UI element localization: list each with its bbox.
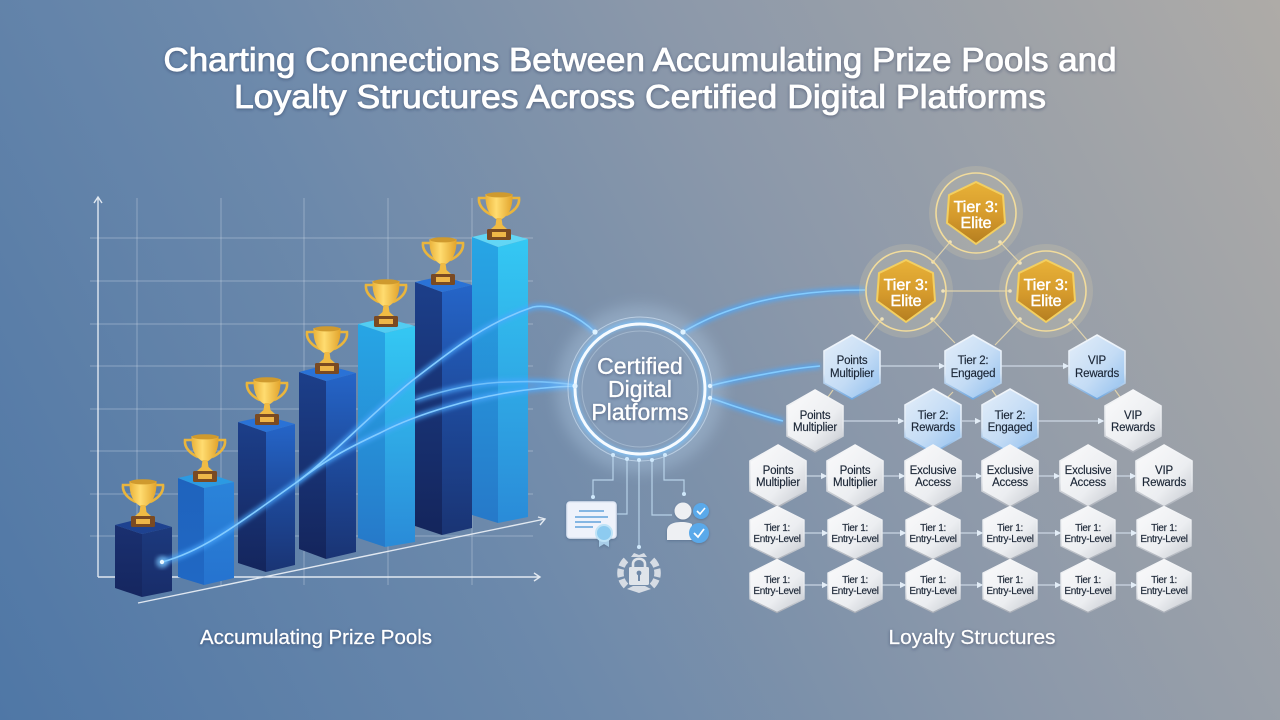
hexagon: tier 2 engaged: Engaged [951,368,995,380]
chart grid and axes [90,197,545,603]
bar 7 [472,231,528,523]
hexagon: tier 1 row 5 a: Tier 1: [764,575,790,586]
hexagon: points multiplier row 2: Multiplier [793,422,837,434]
elite hexagon right [999,244,1093,338]
hexagon: vip rewards row 3 [1136,445,1192,507]
hexagon: vip rewards row 3: VIP [1155,465,1173,477]
elite hexagon left: Tier 3: [884,277,928,294]
hexagon: tier 1 row 4 c: Entry-Level [909,534,957,545]
hexagon: exclusive access b: Exclusive [987,465,1033,477]
hexagon: vip rewards: Rewards [1075,368,1119,380]
bar 5 [358,318,415,547]
hexagon: tier 2 engaged [945,335,1001,399]
title [164,41,1116,115]
icon: certificate [567,502,616,547]
icon: trophy 5 [366,279,406,327]
hexagon: tier 2 engaged row 2: Tier 2: [995,410,1025,422]
hexagon: tier 1 row 4 a: Entry-Level [753,534,801,545]
hexagon: tier 1 row 5 f [1137,560,1191,612]
hexagon: tier 1 row 4 c: Tier 1: [920,523,946,534]
connector lines between loyalty hexagons [804,240,1136,585]
hexagon: exclusive access a [905,445,961,507]
hexagon: vip rewards row 2: Rewards [1111,422,1155,434]
hexagon: tier 1 row 4 b: Tier 1: [842,523,868,534]
loyalty pyramid [750,166,1192,612]
label: loyalty structures: Loyalty Structures [888,627,1056,649]
hexagon: tier 2 engaged row 2: Engaged [988,422,1032,434]
hub: certified digital platforms: Certified [597,353,683,379]
hexagon: exclusive access a: Access [915,477,951,489]
hexagon: tier 1 row 5 b: Entry-Level [831,586,879,597]
bar 4 [299,365,356,559]
hexagon: vip rewards [1069,335,1125,399]
hexagon: exclusive access c [1060,445,1116,507]
icon: trophy 2 [185,434,225,482]
elite hexagon top: Tier 3: [954,199,998,216]
hub: certified digital platforms: Platforms [591,399,689,425]
hexagon: tier 1 row 5 f: Entry-Level [1140,586,1188,597]
hexagon: tier 2 rewards: Tier 2: [918,410,948,422]
hexagon: tier 1 row 5 e: Entry-Level [1064,586,1112,597]
connector lines from hub to icons [591,453,686,549]
glowing connector curves from chart to hub [156,290,865,568]
bar chart: accumulating prize pools [90,192,545,603]
hexagon: points multiplier row 3a [750,445,806,507]
hexagon: tier 2 rewards [905,389,961,453]
hexagon: tier 1 row 4 f [1137,506,1191,560]
hub: certified digital platforms: Digital [608,376,672,402]
icon: trophy 7 [479,192,519,240]
title: Charting Connections Between Accumulating Prize Pools and [164,41,1116,78]
label: accumulating prize pools: Accumulating Prize Pools [200,627,432,649]
hexagon: tier 1 row 5 c [906,560,960,612]
hexagon: points multiplier: Points [837,355,868,367]
icon: trophy 4 [307,326,347,374]
hexagon: tier 2 engaged row 2 [982,389,1038,453]
hexagon: tier 1 row 4 c [906,506,960,560]
hexagon: tier 1 row 4 f: Tier 1: [1151,523,1177,534]
hexagon: exclusive access b: Access [992,477,1028,489]
hexagon: tier 1 row 4 b: Entry-Level [831,534,879,545]
icon: trophy 6 [423,237,463,285]
bar 6 [415,276,472,535]
icon: verified users [667,502,709,543]
hexagon: points multiplier: Multiplier [830,368,874,380]
title: Loyalty Structures Across Certified Digital Platforms [234,78,1046,115]
hexagon: tier 1 row 4 a: Tier 1: [764,523,790,534]
hexagon: tier 1 row 4 a [750,506,804,560]
hexagon: points multiplier [824,335,880,399]
hexagon: points multiplier row 2 [787,390,843,452]
bar 3 [238,416,295,572]
icon: trophy 1 [123,479,163,527]
hexagon: exclusive access c: Exclusive [1065,465,1111,477]
hexagon: tier 2 rewards: Rewards [911,422,955,434]
hexagon: tier 1 row 5 d: Tier 1: [997,575,1023,586]
hexagon: tier 1 row 5 c: Tier 1: [920,575,946,586]
hexagon: exclusive access a: Exclusive [910,465,956,477]
bar 1 [115,518,172,597]
hexagon: points multiplier row 3b: Points [840,465,871,477]
hexagon: tier 1 row 5 a [750,560,804,612]
hexagon: tier 1 row 5 f: Tier 1: [1151,575,1177,586]
hexagon: tier 1 row 4 d [983,506,1037,560]
elite hexagon right: Elite [1030,293,1062,310]
hexagon: tier 1 row 4 e: Tier 1: [1075,523,1101,534]
hexagon: tier 1 row 5 e: Tier 1: [1075,575,1101,586]
hexagon: tier 1 row 5 b: Tier 1: [842,575,868,586]
hexagon: tier 1 row 4 e: Entry-Level [1064,534,1112,545]
elite hexagon left: Elite [890,293,922,310]
hexagon: tier 1 row 5 d [983,560,1037,612]
hexagon: exclusive access b [982,445,1038,507]
hexagon: tier 1 row 4 d: Entry-Level [986,534,1034,545]
hub: certified digital platforms [556,305,724,473]
elite hexagon left [859,244,953,338]
hexagon: tier 1 row 5 d: Entry-Level [986,586,1034,597]
hexagon: points multiplier row 3b [827,445,883,507]
elite hexagon top [929,166,1023,260]
hexagon: tier 1 row 5 a: Entry-Level [753,586,801,597]
hexagon: tier 1 row 4 b [828,506,882,560]
hexagon: points multiplier row 2: Points [800,410,831,422]
hexagon: tier 1 row 5 c: Entry-Level [909,586,957,597]
hexagon: points multiplier row 3b: Multiplier [833,477,877,489]
hexagon: tier 1 row 4 e [1061,506,1115,560]
hexagon: tier 1 row 4 d: Tier 1: [997,523,1023,534]
hexagon: points multiplier row 3a: Multiplier [756,477,800,489]
hexagon: vip rewards row 3: Rewards [1142,477,1186,489]
elite hexagon top: Elite [960,215,992,232]
hexagon: tier 1 row 4 f: Entry-Level [1140,534,1188,545]
icon: trophy 3 [247,377,287,425]
hexagon: vip rewards: VIP [1088,355,1106,367]
hexagon: exclusive access c: Access [1070,477,1106,489]
hexagon: vip rewards row 2: VIP [1124,410,1142,422]
icon: security lock and gear [620,553,658,593]
hexagon: tier 1 row 5 b [828,560,882,612]
hexagon: tier 1 row 5 e [1061,560,1115,612]
hexagon: points multiplier row 3a: Points [763,465,794,477]
hexagon: tier 2 engaged: Tier 2: [958,355,988,367]
elite hexagon right: Tier 3: [1024,277,1068,294]
hexagon: vip rewards row 2 [1105,390,1161,452]
bar 2 [178,472,234,585]
